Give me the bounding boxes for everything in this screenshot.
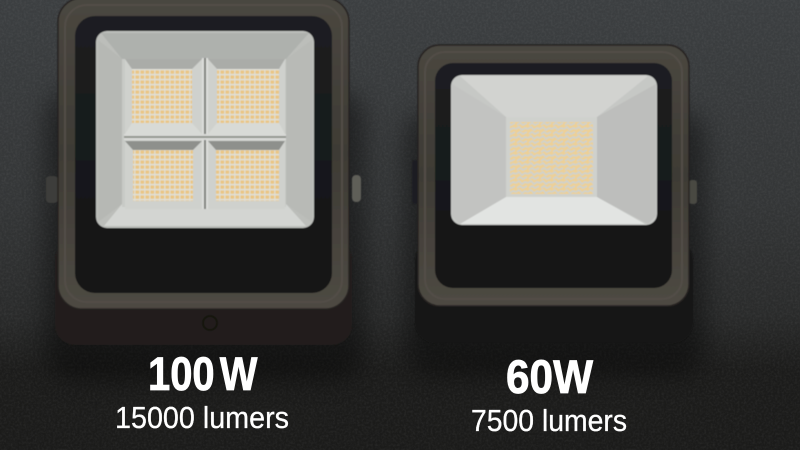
reflector window	[451, 75, 657, 225]
heading: 100W: 100W	[148, 349, 258, 401]
knob: left pivot	[46, 176, 58, 203]
outer frame	[58, 0, 349, 309]
LED module: bottom left	[125, 140, 202, 209]
logo mark	[203, 316, 217, 330]
knob: right pivot	[689, 180, 697, 204]
black fascia	[435, 63, 672, 288]
label: 60W	[471, 350, 627, 438]
black fascia	[75, 16, 332, 293]
reflector window	[96, 31, 314, 228]
LED module: top left	[125, 59, 202, 134]
LED module: top right	[208, 59, 285, 134]
heading: 60W: 60W	[506, 350, 594, 403]
outer frame	[418, 45, 689, 306]
floodlight: 100W	[46, 0, 361, 345]
knob: left pivot	[412, 160, 418, 204]
text: 7500 lumers: 7500 lumers	[471, 403, 627, 438]
label: 100W	[115, 349, 289, 435]
text: 15000 lumers: 15000 lumers	[115, 400, 289, 435]
bracket: 100W rear housing	[55, 240, 352, 345]
LED module: bottom right	[208, 140, 285, 209]
knob: right pivot	[352, 175, 361, 202]
floodlight: 60W	[412, 45, 697, 343]
LED module	[510, 122, 593, 194]
bracket: 60W rear housing	[415, 240, 693, 343]
